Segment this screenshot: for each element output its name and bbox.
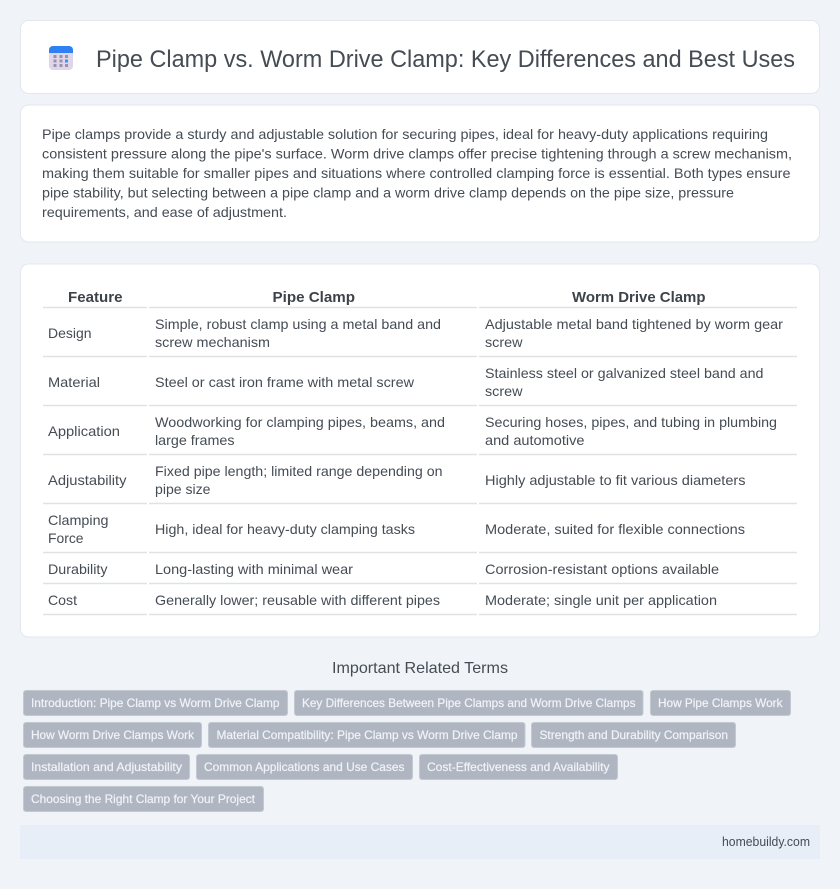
text block: introduction paragraph: requirements, and ease of adjustment.: [42, 204, 287, 220]
table row: application: large frames: [155, 432, 234, 448]
text block: introduction paragraph: Pipe clamps provide a sturdy and adjustable solution for securing pipes, ideal for heavy-duty applications requiring: [42, 126, 768, 142]
table row: material: Stainless steel or galvanized steel band and: [485, 365, 764, 381]
text block: introduction paragraph: [42, 126, 792, 220]
table row: application: Securing hoses, pipes, and tubing in plumbing: [485, 414, 777, 430]
tag: introduction: [24, 690, 288, 716]
table row: cost: Moderate; single unit per application: [485, 592, 717, 608]
table row: clamping force: [48, 512, 745, 546]
table row: adjustability: Adjustability: [48, 472, 126, 488]
table row: application: Woodworking for clamping pipes, beams, and: [155, 414, 445, 430]
table row: durability: Durability: [48, 561, 108, 577]
table row: design: Simple, robust clamp using a metal band and: [155, 316, 441, 332]
tag: material compatibility: [208, 722, 525, 748]
table row: material: Steel or cast iron frame with metal screw: [155, 374, 415, 390]
table row: durability: Long-lasting with minimal wear: [155, 561, 353, 577]
table row: design: screw mechanism: [155, 334, 270, 350]
tag: how pipe clamps work: [650, 690, 790, 716]
table row: application: and automotive: [485, 432, 585, 448]
tag: material compatibility: Material Compatibility: Pipe Clamp vs Worm Drive Clamp: [216, 728, 518, 742]
table header row: [68, 289, 706, 306]
table row: design: [48, 316, 783, 350]
table row: material: [48, 365, 764, 399]
footer source text: homebuildy.com: [722, 835, 810, 849]
related term tags: [24, 690, 790, 812]
table row: cost: Generally lower; reusable with different pipes: [155, 592, 440, 608]
table row: adjustability: [48, 463, 746, 497]
tag: common applications: [196, 754, 412, 780]
table row: adjustability: Fixed pipe length; limited range depending on: [155, 463, 442, 479]
tag: how pipe clamps work: How Pipe Clamps Work: [658, 696, 783, 710]
table row: material: Material: [48, 374, 100, 390]
tag: key differences: Key Differences Between Pipe Clamps and Worm Drive Clamps: [302, 696, 636, 710]
table row: design: Design: [48, 325, 92, 341]
table row: adjustability: Highly adjustable to fit various diameters: [485, 472, 746, 488]
table row: durability: [48, 561, 719, 577]
tag: key differences: [294, 690, 643, 716]
table header row: Feature: [68, 289, 122, 306]
tag: choosing the right clamp: [24, 786, 264, 812]
table row: design: Adjustable metal band tightened by worm gear: [485, 316, 783, 332]
table row: durability: Corrosion-resistant options available: [485, 561, 719, 577]
tag: strength and durability: Strength and Durability Comparison: [540, 728, 728, 742]
table header row: Worm Drive Clamp: [572, 289, 706, 306]
footer bar: [20, 825, 820, 859]
table row: clamping force: High, ideal for heavy-duty clamping tasks: [155, 521, 415, 537]
tag: common applications: Common Applications and Use Cases: [204, 760, 404, 774]
tag: installation: [24, 754, 190, 780]
heading: important related terms: Important Related Terms: [332, 660, 508, 677]
tag: strength and durability: [532, 722, 736, 748]
tag: installation: Installation and Adjustability: [31, 760, 182, 774]
table row: material: screw: [485, 383, 523, 399]
panel: title header: [20, 20, 820, 94]
icon: calendar grid: [49, 46, 73, 70]
text block: introduction paragraph: pipe stability, but selecting between a pipe clamp and a worm drive clamp depends on the pipe size, pressure: [42, 184, 734, 200]
tag: cost-effectiveness: [420, 754, 618, 780]
table row: cost: [48, 592, 717, 608]
table row: cost: Cost: [48, 592, 77, 608]
text block: introduction paragraph: consistent pressure along the pipe's surface. Worm drive clamps offer precise tightening through a screw mechanism,: [42, 146, 792, 162]
table row: clamping force: Moderate, suited for flexible connections: [485, 521, 745, 537]
table row: application: [48, 414, 777, 448]
table header row: Pipe Clamp: [272, 289, 355, 306]
panel: comparison table: [20, 264, 820, 637]
text block: introduction paragraph: making them suitable for smaller pipes and situations where controlled clamping force is essential. Both types ensure: [42, 165, 791, 181]
table row: application: Application: [48, 423, 120, 439]
table row: clamping force: Force: [48, 530, 84, 546]
tag: introduction: Introduction: Pipe Clamp vs Worm Drive Clamp: [31, 696, 280, 710]
tag: how worm drive clamps work: How Worm Drive Clamps Work: [31, 728, 195, 742]
table row: adjustability: pipe size: [155, 481, 211, 497]
table row: clamping force: Clamping: [48, 512, 108, 528]
title: Pipe Clamp vs. Worm Drive Clamp: Key Differences and Best Uses: [96, 46, 795, 73]
tag: choosing the right clamp: Choosing the Right Clamp for Your Project: [31, 792, 256, 806]
panel: introduction: [20, 105, 820, 242]
tag: how worm drive clamps work: [24, 722, 202, 748]
table row: design: screw: [485, 334, 523, 350]
tag: cost-effectiveness: Cost-Effectiveness and Availability: [427, 760, 610, 774]
